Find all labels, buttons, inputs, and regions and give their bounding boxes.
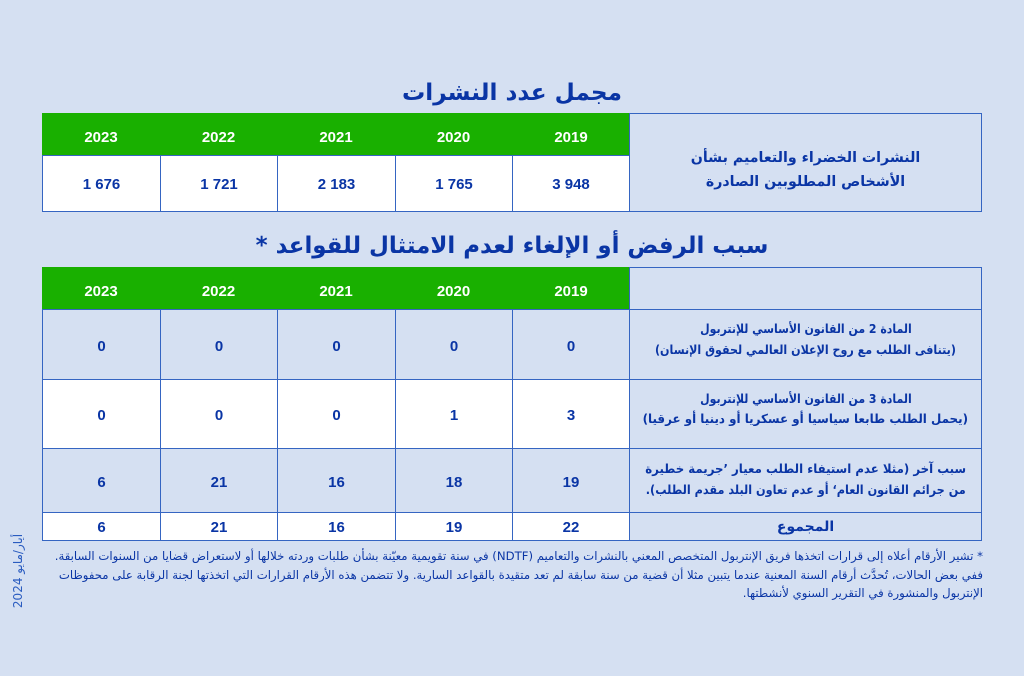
header row: years <box>42 267 630 309</box>
header row: years: 2020 <box>437 128 470 146</box>
row: notice counts: 1 765 <box>435 176 473 193</box>
row: article 2: 0 <box>215 338 223 354</box>
row: article 3: 0 <box>97 406 106 424</box>
row: article 2: 0 <box>97 338 106 354</box>
row: article 3: 3 <box>567 406 575 424</box>
footnote <box>55 548 983 600</box>
row label: green notices and diffusions: الأشخاص المطلوبين الصادرة <box>706 174 905 190</box>
row: other reason: 6 <box>97 474 106 490</box>
header row: years: 2023 <box>84 128 118 146</box>
row: notice counts: 2 183 <box>318 176 355 193</box>
header row: years: 2022 <box>202 282 235 300</box>
row: article 3: (يحمل الطلب طابعا سياسيا أو عسكريا أو دينيا أو عرقيا) <box>643 411 968 426</box>
row: article 2: 0 <box>567 338 575 354</box>
footnote: ففي بعض الحالات، تُحدَّث أرقام السنة المعنية عندما يتبين مثلا أن قضية من سنة سابقة لم تعد متقيدة بالقواعد السارية. ولا تتضمن هذه الأرقام القرارات التي اتخذتها لجنة الرقابة على محفوظات <box>59 568 983 582</box>
row: article 3: المادة 3 من القانون الأساسي للإنتربول <box>700 390 911 406</box>
header row: years: 2021 <box>319 282 353 300</box>
row: other reason: 21 <box>211 474 227 490</box>
row: article 3 <box>42 380 982 448</box>
row: article 2: 0 <box>332 338 341 354</box>
row: total: 16 <box>328 519 345 536</box>
header row: years: 2019 <box>554 282 588 300</box>
footnote: الإنتربول والمنشورة في التقرير السنوي لأنشطتها. <box>743 586 983 600</box>
footnote: * تشير الأرقام أعلاه إلى قرارات اتخذها فريق الإنتربول المتخصص المعني بالنشرات والتعاميم (NDTF) في سنة تقويمية معيّنة بشأن طلبات وردته خلالها أو لاستعراض قضايا من السنوات السابقة. <box>55 549 983 563</box>
header row: years: 2020 <box>437 282 470 300</box>
header row: years: 2021 <box>319 128 353 146</box>
row: other reason: من جرائم القانون العام‘ أو عدم تعاون البلد مقدم الطلب). <box>645 482 966 496</box>
row label: green notices and diffusions <box>629 113 982 212</box>
header row: years <box>42 113 630 155</box>
header row: years: 2022 <box>202 128 235 146</box>
date label, rotated: أيار/مايو 2024 <box>11 534 25 608</box>
table: notices issued <box>42 113 982 212</box>
row: other reason: 19 <box>563 474 579 490</box>
header row: years: 2023 <box>84 282 118 300</box>
row: article 3: 0 <box>215 406 223 424</box>
row: total <box>42 513 982 541</box>
row: notice counts <box>42 155 629 212</box>
row: notice counts: 3 948 <box>552 176 590 193</box>
row: article 2 <box>42 309 982 379</box>
row: total: 22 <box>563 519 579 536</box>
row: other reason: سبب آخر (مثلا عدم استيفاء الطلب معيار ’جريمة خطيرة <box>645 460 966 476</box>
row: article 2: 0 <box>450 338 458 354</box>
header row: years: 2019 <box>554 128 588 146</box>
row label: green notices and diffusions: النشرات الخضراء والتعاميم بشأن <box>691 150 920 166</box>
row: total: 6 <box>97 519 106 536</box>
row: article 3: 1 <box>450 406 458 424</box>
row: total: 21 <box>211 519 227 536</box>
row: notice counts: 1 676 <box>83 176 120 193</box>
row: other reason: 16 <box>328 474 345 490</box>
row: article 3: 0 <box>332 406 341 424</box>
row: article 2: المادة 2 من القانون الأساسي للإنتربول <box>700 321 911 336</box>
row: total: المجموع <box>777 519 834 535</box>
title: reason for refusal: سبب الرفض أو الإلغاء لعدم الامتثال للقواعد * <box>256 233 768 259</box>
title: total notices: مجمل عدد النشرات <box>402 79 622 106</box>
row: notice counts: 1 721 <box>200 176 238 193</box>
table: refusal reasons <box>42 267 982 541</box>
row: article 2: (يتنافى الطلب مع روح الإعلان العالمي لحقوق الإنسان) <box>655 342 956 356</box>
row: other reason <box>42 449 982 512</box>
row: other reason: 18 <box>446 474 462 490</box>
row: total: 19 <box>446 519 462 536</box>
header blank cell <box>629 267 982 310</box>
